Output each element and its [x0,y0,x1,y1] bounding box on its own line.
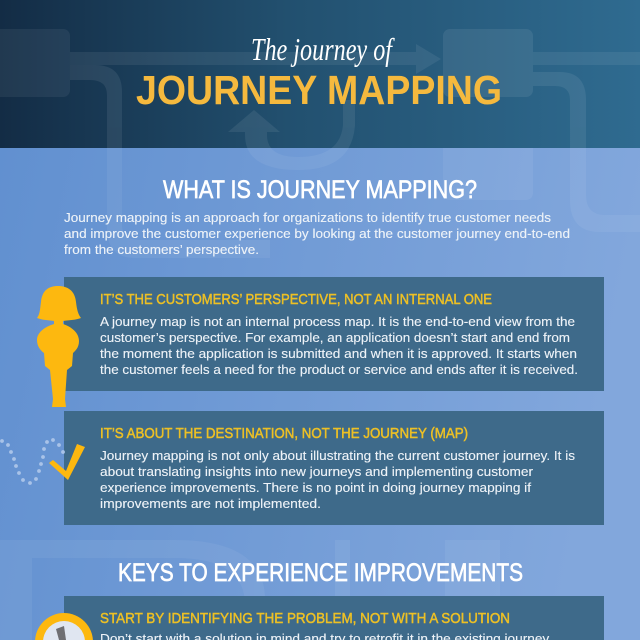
title script line: The journey of [251,31,395,67]
intro paragraph: and improve the customer experience by looking at the customer journey end-to-end [64,226,570,241]
panel body text: experience improvements. There is no point in doing journey mapping if [100,480,531,495]
panel body text: about translating insights into new journeys and implementing customer [100,464,534,479]
background flow pattern: header [0,29,640,148]
panel heading: IT’S ABOUT THE DESTINATION, NOT THE JOURNEY (MAP) [100,425,468,442]
icon: dotted path [0,438,65,485]
icon: warning badge [35,613,93,640]
panel body text: improvements are not implemented. [100,496,321,511]
panel body text [100,314,578,377]
header background [0,0,640,148]
panel body text [100,448,575,511]
background flow pattern: main [0,148,348,640]
panel body text: customer’s perspective. For example, an application doesn’t start and end from [100,330,570,345]
panel body text: Journey mapping is not only about illustrating the current customer journey. It is [100,448,575,463]
icon: check mark [49,444,85,480]
panel heading: START BY IDENTIFYING THE PROBLEM, NOT WITH A SOLUTION [100,610,510,627]
panel: start by identifying the problem [64,596,604,640]
panel: customers' perspective [64,277,604,391]
panel heading: IT’S THE CUSTOMERS’ PERSPECTIVE, NOT AN INTERNAL ONE [100,291,492,308]
intro paragraph: from the customers’ perspective. [64,242,259,257]
title main line: JOURNEY MAPPING [136,67,502,113]
section heading: keys to experience improvements: KEYS TO EXPERIENCE IMPROVEMENTS [118,559,523,587]
panel: destination not journey [64,411,604,525]
panel body text: the moment the application is submitted and when it is approved. It starts when [100,346,577,361]
title [136,31,502,113]
intro paragraph [64,210,570,257]
main background [0,148,640,640]
icon: person silhouette [37,286,81,407]
panel body text: A journey map is not an internal process map. It is the end-to-end view from the [100,314,575,329]
section heading: what is journey mapping: WHAT IS JOURNEY MAPPING? [163,176,477,204]
panel body text: the customer feels a need for the product or service and ends after it is received. [100,362,578,377]
intro paragraph: Journey mapping is an approach for organizations to identify true customer needs [64,210,551,225]
